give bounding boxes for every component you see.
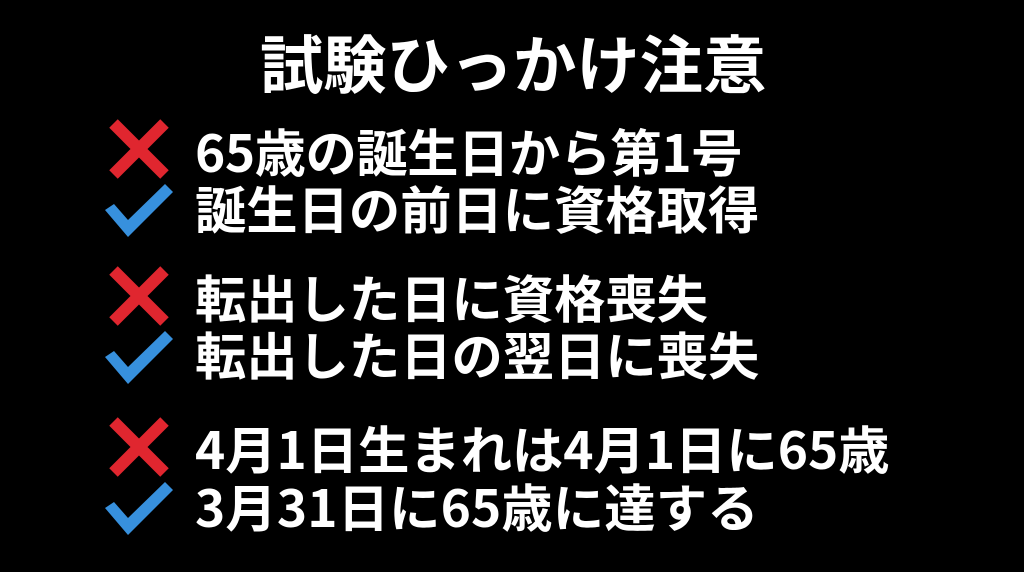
correct statement 1: 誕生日の前日に資格取得 bbox=[195, 169, 759, 244]
icon: red cross 1 bbox=[109, 119, 169, 179]
icon: red cross 3 bbox=[109, 417, 169, 477]
correct statement 2: 転出した日の翌日に喪失 bbox=[195, 315, 759, 390]
icon: red cross 2 bbox=[109, 266, 169, 326]
wrong statement 3: 4月1日生まれは4月1日に65歳 bbox=[195, 409, 890, 484]
correct statement 3: 3月31日に65歳に達する bbox=[195, 467, 759, 542]
icon: blue check 3 bbox=[105, 482, 173, 535]
title: 試験ひっかけ注意 bbox=[260, 16, 766, 107]
icon: blue check 1 bbox=[105, 184, 173, 237]
icon: blue check 2 bbox=[105, 331, 173, 384]
wrong statement 2: 転出した日に資格喪失 bbox=[195, 258, 708, 333]
wrong statement 1: 65歳の誕生日から第1号 bbox=[195, 112, 742, 187]
